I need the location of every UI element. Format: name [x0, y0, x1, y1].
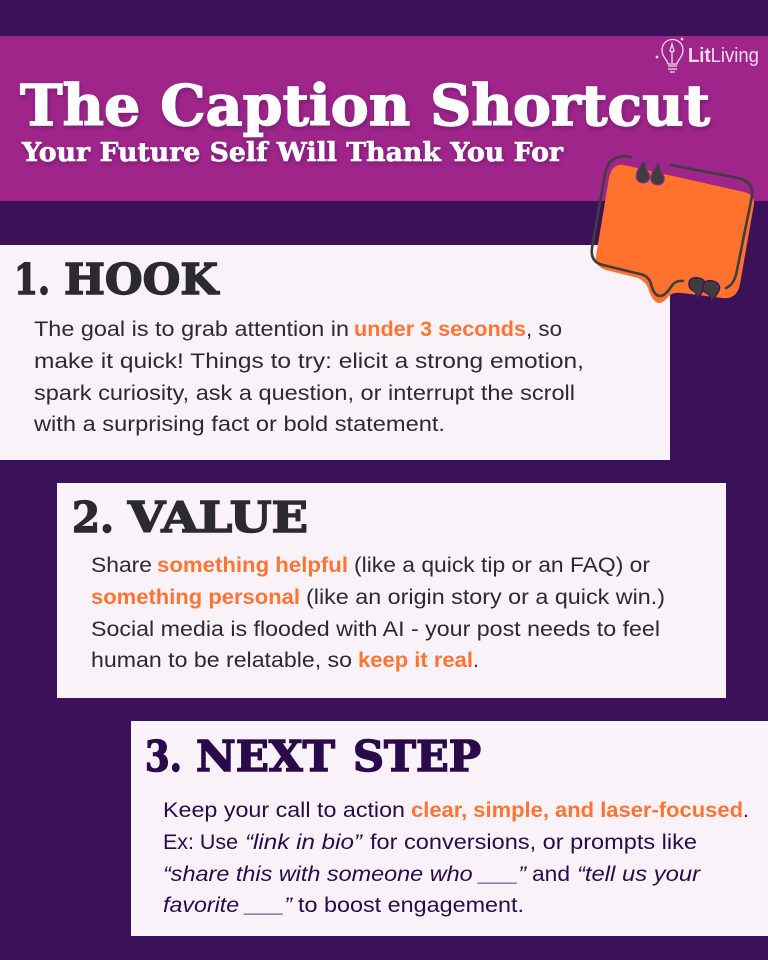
heading: hook: HOOK: [64, 255, 220, 304]
bubble fill: [596, 165, 754, 303]
hook body text: with a surprising fact or bold statement.: [33, 413, 445, 436]
next step body text: clear, simple, and laser-focused: [411, 799, 743, 822]
icon: orange speech bubble: [592, 156, 754, 303]
heading: value: VALUE: [127, 493, 308, 542]
next step body text: and: [532, 863, 570, 886]
panel: next step: [131, 721, 768, 936]
next step body text: for conversions, or prompts like: [370, 831, 697, 854]
next step body text: .: [743, 799, 749, 822]
value body text: (like an origin story or a quick win.): [306, 586, 665, 609]
heading: next step: 3.: [145, 732, 182, 781]
next step body text: Ex: Use: [163, 831, 238, 854]
value body text: Social media is flooded with AI - your post needs to feel: [91, 618, 660, 641]
logo wordmark: LitLiving: [688, 45, 759, 67]
bubble outline: [592, 156, 752, 296]
value body text: human to be relatable, so: [91, 649, 352, 672]
heading: next step: NEXT: [196, 732, 335, 781]
hook body text: spark curiosity, ask a question, or interrupt the scroll: [34, 382, 575, 405]
panel: hook: [0, 245, 670, 460]
header banner: [0, 36, 768, 201]
next step body text: “share this with someone who ___”: [163, 863, 527, 886]
value body text: [91, 554, 665, 672]
closing quote mark: [689, 278, 719, 301]
title: The Caption Shortcut: [20, 73, 710, 139]
heading: hook: 1.: [14, 255, 50, 304]
next step body text: “tell us your: [577, 863, 701, 886]
next step body text: [163, 799, 749, 917]
icon: light bulb: [656, 38, 683, 72]
opening quote mark: [637, 162, 664, 184]
next step body text: to boost engagement.: [298, 894, 524, 917]
next step body text: “link in bio”: [245, 831, 363, 854]
value body text: (like a quick tip or an FAQ) or: [354, 554, 650, 577]
value body text: Share: [91, 554, 152, 577]
hook body text: The goal is to grab attention in: [34, 318, 349, 341]
value body text: something personal: [91, 586, 300, 609]
hook body text: [33, 318, 584, 436]
value body text: something helpful: [157, 554, 348, 577]
heading: value: 2.: [72, 493, 114, 542]
next step body text: favorite ___”: [163, 894, 293, 917]
subtitle: Your Future Self Will Thank You For: [21, 138, 563, 168]
hook body text: under 3 seconds: [354, 318, 526, 341]
hook body text: , so: [526, 318, 562, 341]
logo: LitLiving: [656, 38, 759, 72]
next step body text: Keep your call to action: [163, 799, 405, 822]
value body text: keep it real: [358, 649, 473, 672]
hook body text: make it quick! Things to try: elicit a strong emotion,: [34, 350, 584, 373]
panel: value: [57, 483, 726, 698]
heading: next step: STEP: [353, 732, 481, 781]
value body text: .: [473, 649, 479, 672]
